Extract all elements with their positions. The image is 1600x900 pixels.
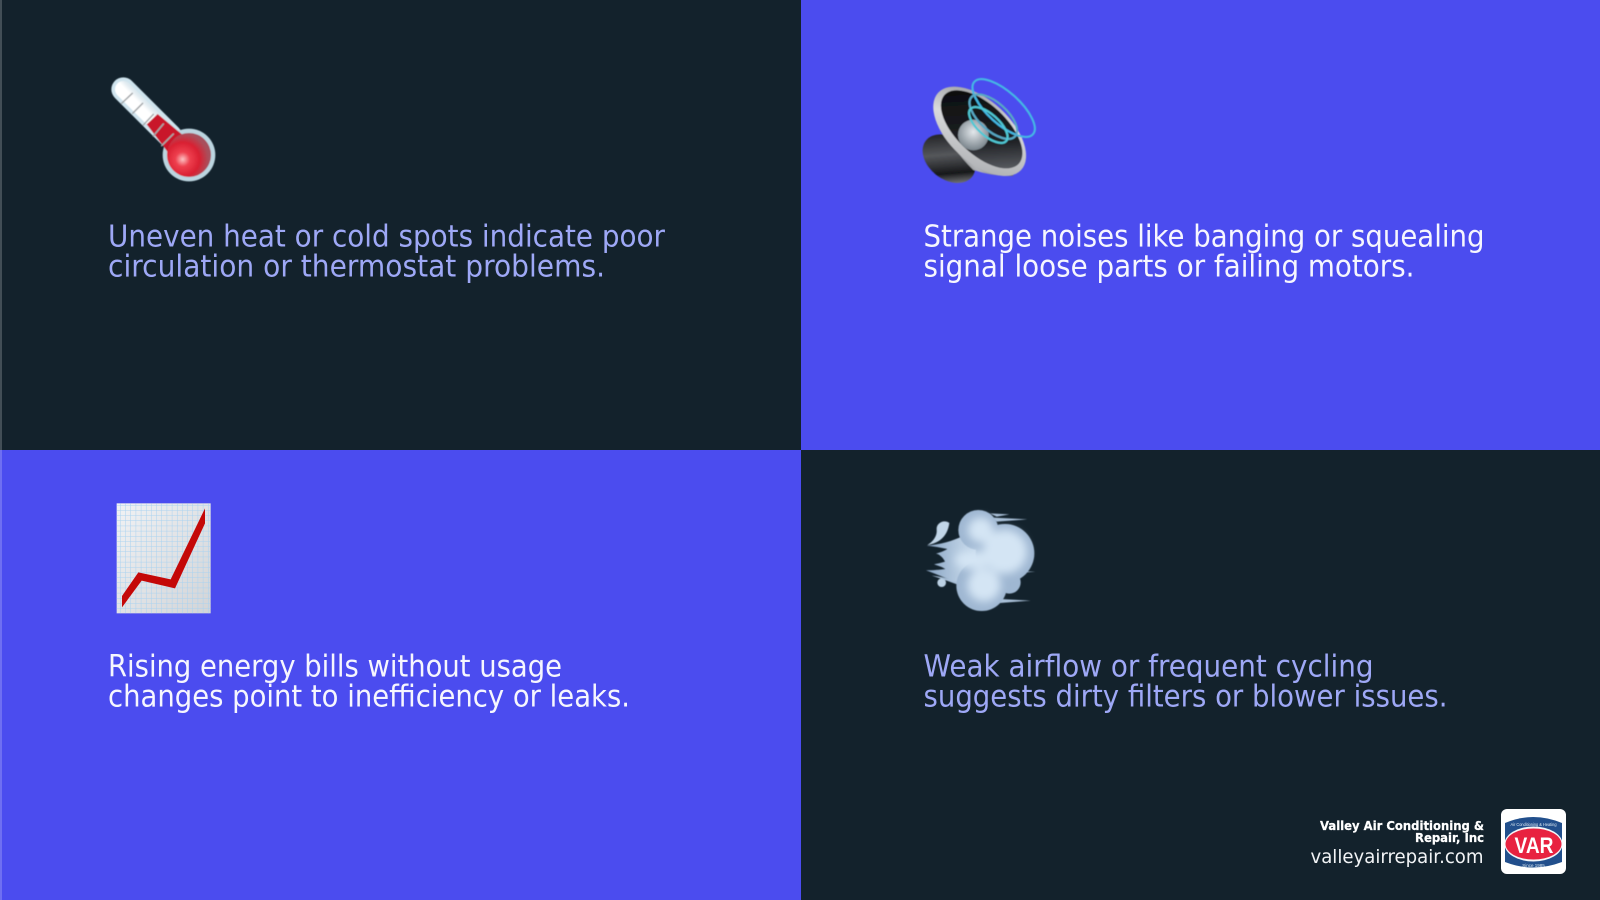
logo	[1501, 809, 1566, 874]
text: strange noises: signal loose parts or failing motors.	[924, 250, 1414, 285]
brand website: valleyairrepair.com	[1310, 846, 1484, 868]
panel: weak airflow	[801, 450, 1600, 900]
icon: speaker	[913, 70, 1044, 193]
icon: air puff	[926, 510, 1035, 611]
brand name	[1320, 818, 1484, 845]
text: weak airflow	[924, 650, 1448, 715]
icon: thermometer	[122, 89, 215, 181]
brand name: Valley Air Conditioning &	[1320, 818, 1484, 833]
text: uneven heat: circulation or thermostat problems.	[108, 250, 605, 285]
panel: rising energy bills	[0, 450, 801, 900]
panel: uneven temperatures	[0, 0, 801, 450]
text: strange noises: Strange noises like banging or squealing	[924, 220, 1484, 255]
logo: VAR	[1514, 833, 1554, 858]
text: weak airflow: Weak airflow or frequent cycling	[924, 650, 1374, 685]
brand name: Repair, Inc	[1415, 830, 1484, 845]
text: weak airflow: suggests dirty filters or blower issues.	[924, 680, 1448, 715]
text: rising bills	[108, 650, 630, 715]
text: rising bills: changes point to inefficiency or leaks.	[108, 680, 630, 715]
text: uneven heat	[108, 220, 666, 285]
text: strange noises	[924, 220, 1484, 285]
text: rising bills: Rising energy bills without usage	[108, 650, 562, 685]
logo: Since 1985	[1522, 863, 1545, 868]
logo: Air Conditioning & Heating	[1510, 822, 1557, 827]
panel: strange noises	[801, 0, 1600, 450]
text: uneven heat: Uneven heat or cold spots indicate poor	[108, 220, 666, 255]
icon: rising chart	[117, 503, 211, 613]
